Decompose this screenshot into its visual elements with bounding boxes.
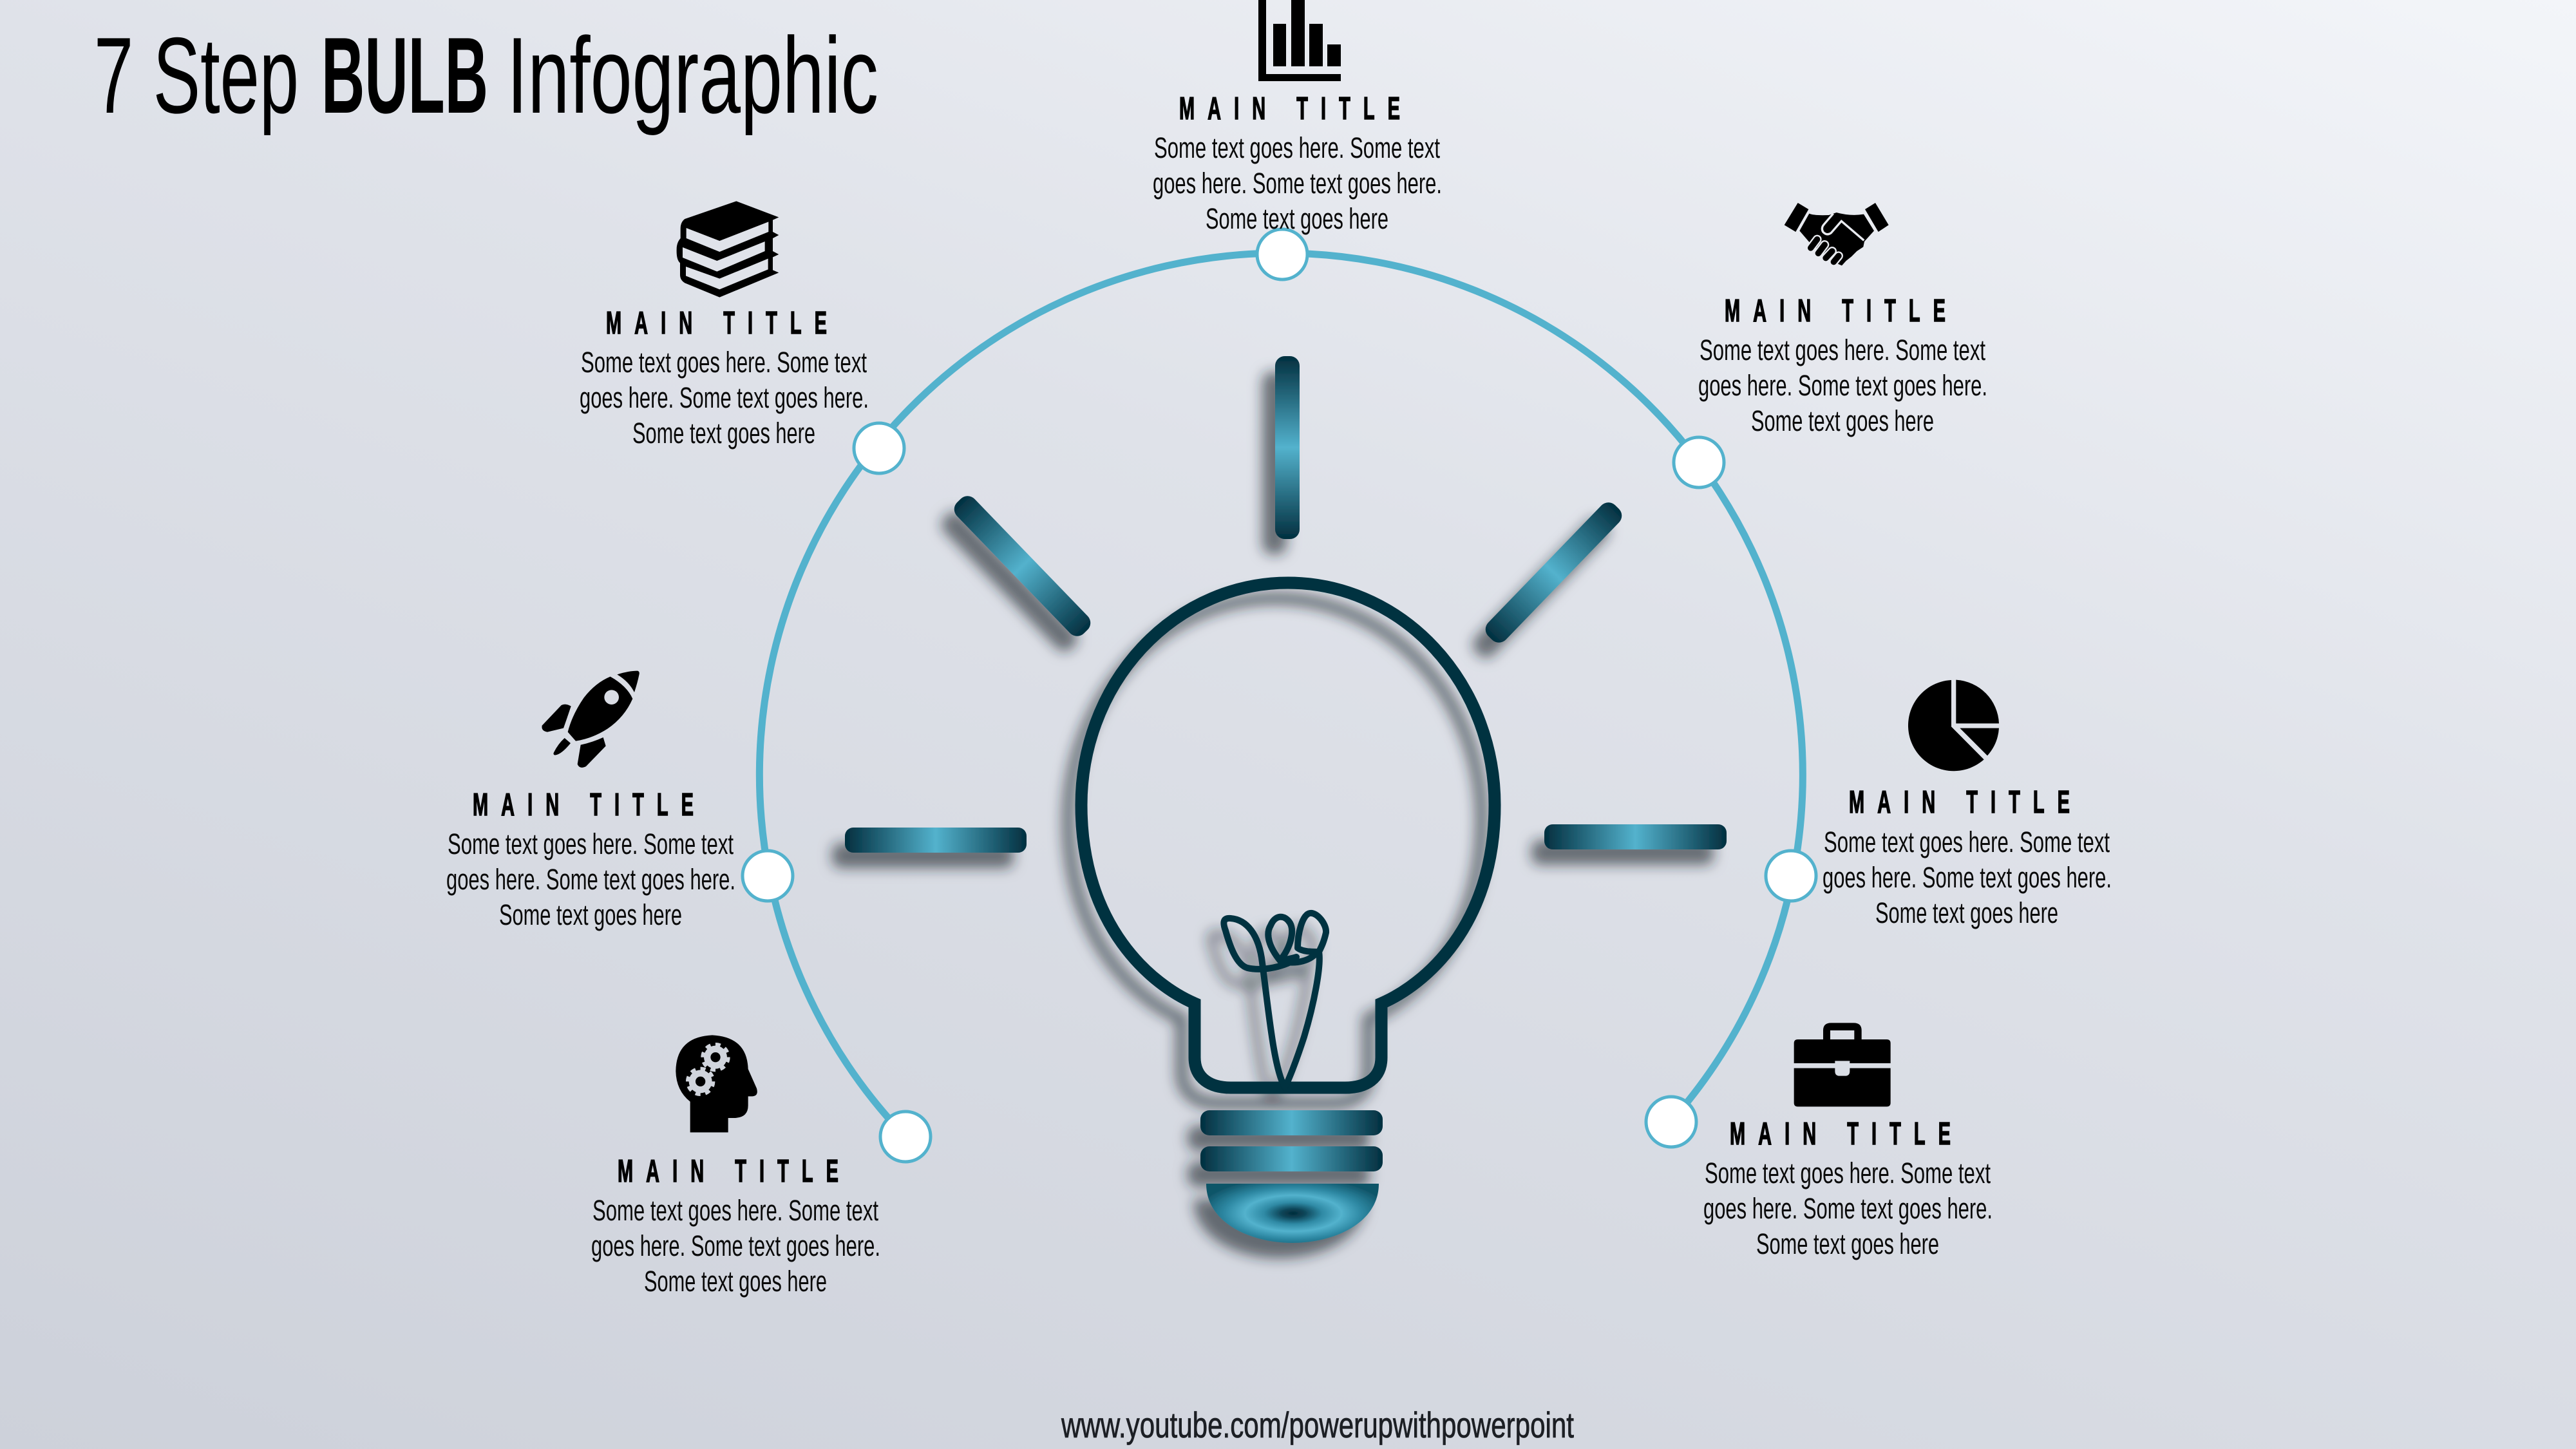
text block: right: MAIN TITLE: [1849, 785, 2083, 820]
text block: lower right: [1703, 1117, 1993, 1260]
text block: left: MAIN TITLE: [473, 788, 706, 822]
text block: lower left: MAIN TITLE: [618, 1154, 851, 1189]
text block: right: goes here. Some text goes here.: [1823, 861, 2112, 894]
ray: upper left: [951, 492, 1094, 640]
timeline arc: [759, 253, 1803, 1137]
text block: right: Some text goes here: [1875, 896, 2058, 929]
bulb outline: [1081, 583, 1495, 1088]
light bulb: [1081, 583, 1495, 1243]
icon: bar chart: [1258, 0, 1341, 81]
node: upper right: [1674, 437, 1724, 488]
text block: top: Some text goes here: [1206, 202, 1388, 235]
text block: left: [446, 788, 735, 931]
text block: lower left: Some text goes here. Some text: [592, 1194, 878, 1227]
text block: lower right: Some text goes here: [1756, 1227, 1939, 1260]
text block: top: MAIN TITLE: [1179, 91, 1413, 126]
title: [94, 15, 878, 136]
node: right: [1766, 851, 1816, 901]
text block: upper right: [1698, 294, 1987, 437]
text block: lower left: goes here. Some text goes here.: [591, 1229, 880, 1262]
socket band 2: [1200, 1146, 1383, 1171]
node: left: [743, 851, 793, 901]
text block: lower left: Some text goes here: [644, 1265, 827, 1298]
ray: right: [1544, 824, 1727, 849]
text block: upper right: Some text goes here: [1751, 404, 1934, 437]
filament: [1224, 913, 1326, 1087]
title: Infographic: [507, 15, 878, 136]
text block: lower left: [591, 1154, 880, 1298]
text block: upper left: [580, 306, 869, 450]
text block: left: goes here. Some text goes here.: [446, 863, 735, 896]
node: top: [1257, 229, 1307, 279]
text block: lower right: Some text goes here. Some text: [1705, 1157, 1991, 1189]
ray: left: [845, 828, 1027, 853]
text block: upper right: MAIN TITLE: [1725, 294, 1958, 328]
text block: top: Some text goes here. Some text: [1154, 131, 1440, 164]
text block: upper left: MAIN TITLE: [606, 306, 840, 341]
icon: books: [677, 201, 779, 298]
icon: briefcase: [1794, 1023, 1891, 1106]
text block: upper left: Some text goes here: [632, 417, 815, 450]
text block: lower right: goes here. Some text goes here.: [1703, 1192, 1993, 1225]
text block: upper left: goes here. Some text goes here.: [580, 381, 869, 414]
node: lower right: [1646, 1097, 1696, 1147]
footer url: www.youtube.com/powerupwithpowerpoint: [1061, 1405, 1574, 1445]
node: upper left: [854, 423, 904, 473]
text block: top: goes here. Some text goes here.: [1153, 167, 1442, 200]
icon: handshake: [1785, 203, 1889, 265]
text block: left: Some text goes here: [499, 898, 682, 931]
icon: head with gears: [676, 1035, 757, 1132]
text block: left: Some text goes here. Some text: [448, 828, 734, 860]
ray: upper right: [1482, 498, 1625, 647]
text block: upper left: Some text goes here. Some text: [581, 346, 867, 379]
title: 7 Step: [94, 15, 299, 136]
ray: top: [1275, 356, 1300, 539]
text block: top: [1153, 91, 1442, 235]
text block: upper right: Some text goes here. Some text: [1700, 334, 1985, 366]
text block: right: Some text goes here. Some text: [1824, 826, 2110, 858]
text block: upper right: goes here. Some text goes here.: [1698, 369, 1987, 402]
socket band 1: [1200, 1110, 1383, 1135]
icon: rocket: [542, 671, 639, 768]
text block: right: [1823, 785, 2112, 929]
node: lower left: [880, 1112, 931, 1162]
icon: pie chart: [1908, 680, 1999, 771]
socket base: [1206, 1184, 1379, 1243]
text block: lower right: MAIN TITLE: [1730, 1117, 1964, 1151]
title: BULB: [321, 15, 488, 136]
